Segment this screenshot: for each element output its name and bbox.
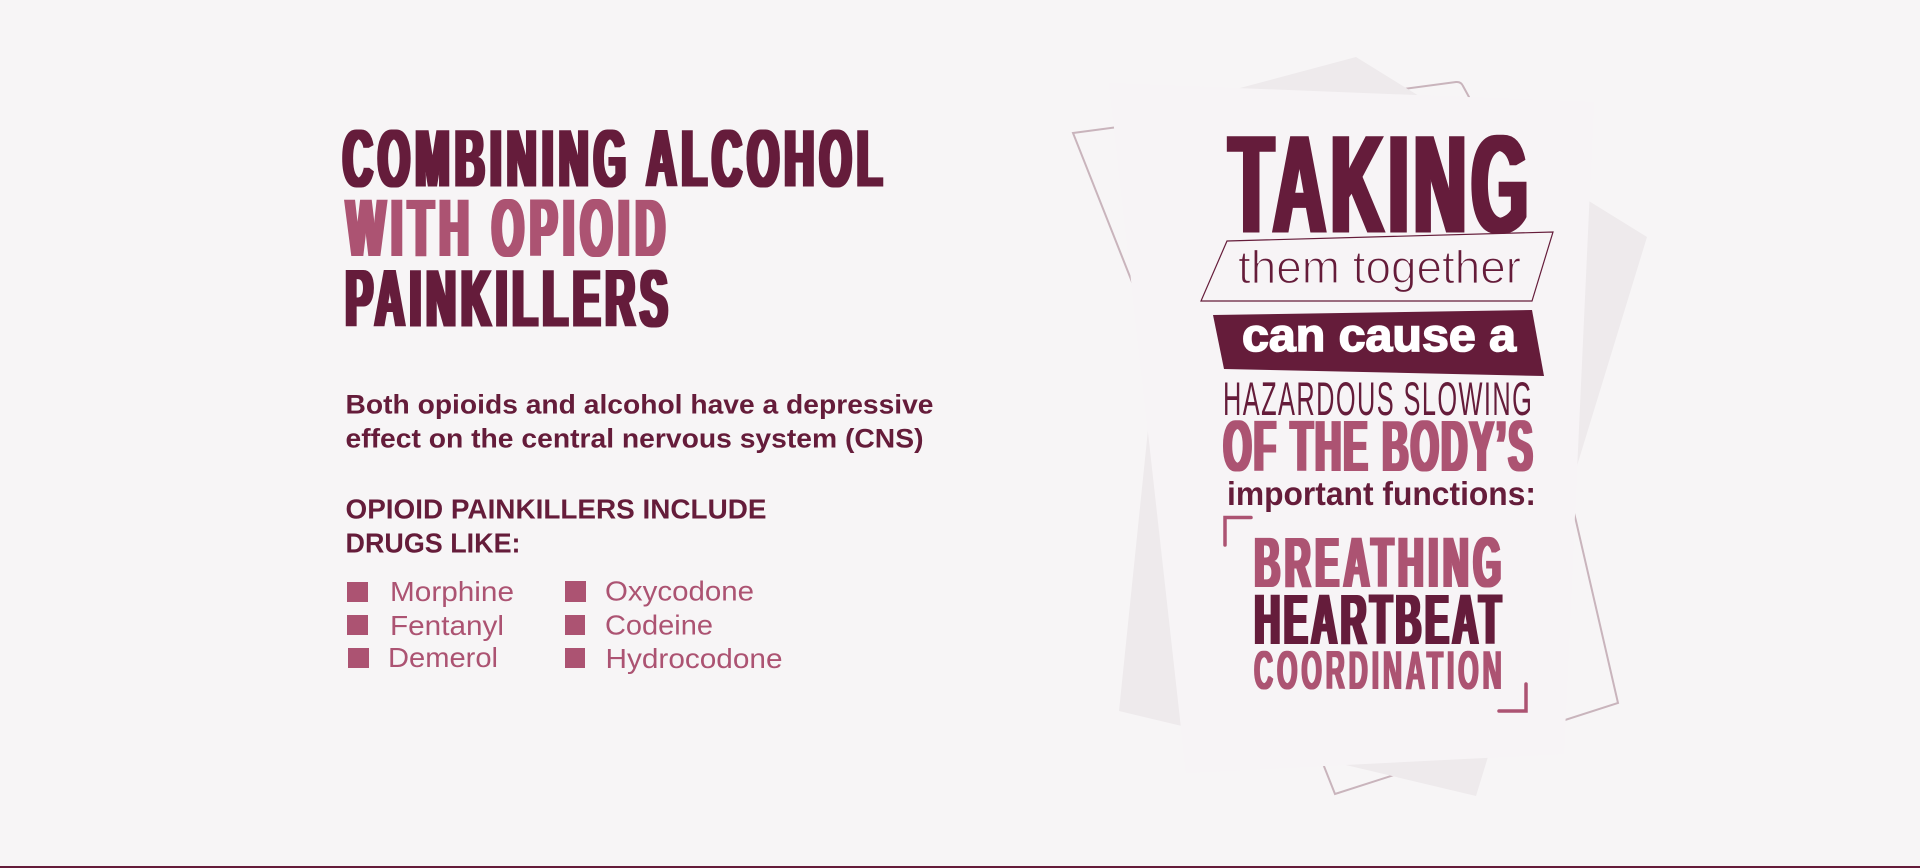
heading: drugs list: OPIOID PAINKILLERS INCLUDE — [346, 494, 766, 524]
panel: left text column — [343, 112, 934, 674]
bracket: top left — [1225, 518, 1251, 545]
callout: them together: them together — [1238, 241, 1521, 293]
banner: can cause a: can cause a — [1242, 309, 1516, 361]
callout: them together — [1201, 232, 1553, 301]
text: important functions: important functions: — [1227, 475, 1536, 512]
title line 2: WITH OPIOID — [346, 181, 665, 274]
list: opioid drugs, column 1 — [347, 576, 514, 673]
banner: can cause a — [1213, 309, 1544, 376]
heading: drugs list: DRUGS LIKE: — [346, 528, 520, 558]
list: opioid drugs, column 2: Hydrocodone — [606, 643, 782, 674]
front sheet — [1109, 83, 1594, 773]
panel: front sheet message — [1201, 106, 1553, 711]
text: of the body's: OF THE BODY’S — [1224, 406, 1532, 487]
heading: drugs list — [346, 494, 766, 558]
list: body functions — [1254, 522, 1502, 702]
text: hazardous slowing: HAZARDOUS SLOWING — [1223, 374, 1532, 426]
title line 1: COMBINING ALCOHOL — [343, 112, 882, 204]
panel: stacked paper sheets — [1073, 57, 1647, 796]
list: body functions: COORDINATION — [1254, 641, 1502, 702]
title — [343, 112, 882, 344]
text block: CNS description: Both opioids and alcohol have a depressive — [346, 390, 934, 420]
list: opioid drugs, column 2 — [565, 576, 782, 674]
grey back sheet — [1119, 57, 1647, 796]
list: body functions: HEARTBEAT — [1254, 579, 1501, 659]
outlined back sheet — [1073, 82, 1618, 794]
list: opioid drugs, column 1: Fentanyl — [390, 610, 504, 641]
text block: CNS description — [346, 390, 934, 454]
bottom rule — [0, 866, 1920, 868]
bracket: bottom right — [1499, 684, 1526, 711]
list: body functions: BREATHING — [1254, 522, 1501, 602]
heading: TAKING: TAKING — [1229, 106, 1528, 263]
text block: CNS description: effect on the central nervous system (CNS) — [346, 424, 924, 454]
list: opioid drugs, column 1: Demerol — [388, 642, 498, 673]
title line 3: PAINKILLERS — [346, 252, 668, 344]
list: opioid drugs, column 2: Codeine — [605, 610, 713, 640]
list: opioid drugs, column 1: Morphine — [390, 576, 514, 607]
list: opioid drugs, column 2: Oxycodone — [605, 576, 754, 606]
